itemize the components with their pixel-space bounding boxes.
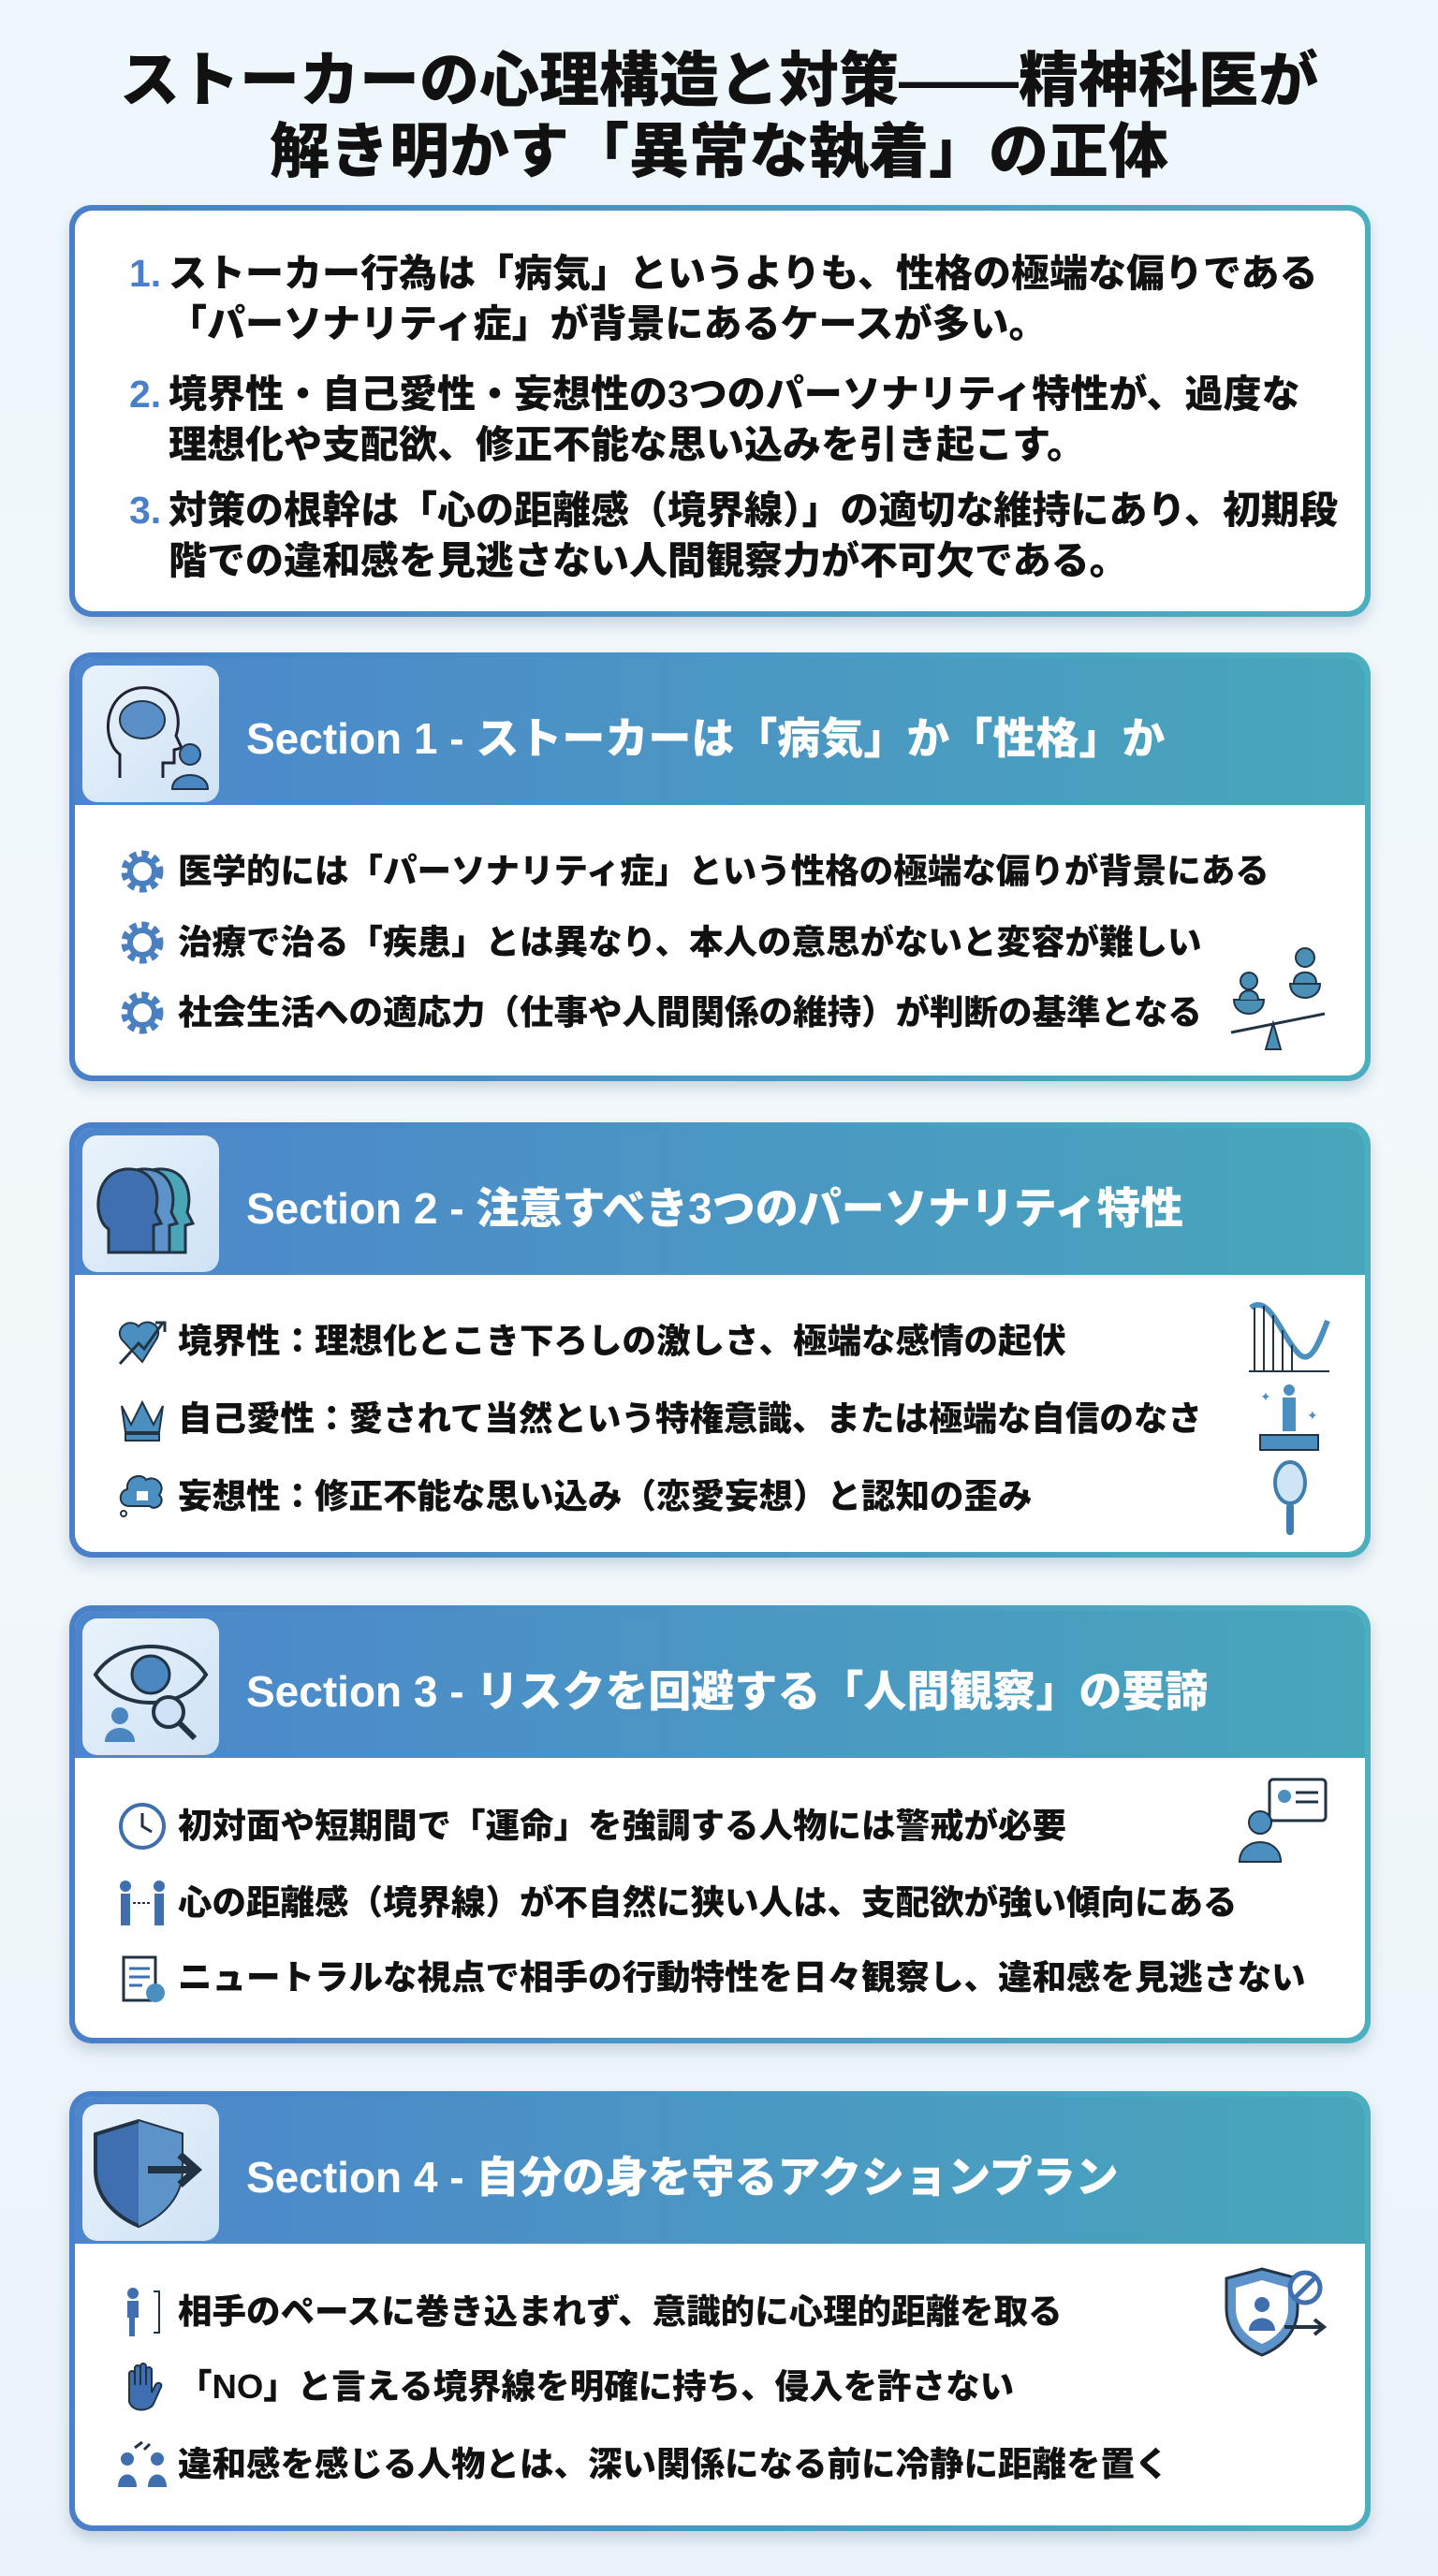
bullet 3-3: ニュートラルな視点で相手の行動特性を日々観察し、違和感を見逃さない [178, 1958, 1305, 1997]
summary point 3: 階での違和感を見逃さない人間観察力が不可欠である。 [169, 539, 1128, 582]
panel: section 3 [69, 1605, 1371, 2043]
icon: head with brain [82, 666, 219, 802]
summary point 3 [129, 489, 1338, 582]
icon: gear [122, 992, 163, 1033]
icon: clock [119, 1803, 166, 1850]
summary point 2 [129, 373, 1300, 466]
summary point 3: 対策の根幹は「心の距離感（境界線）」の適切な維持にあり、初期段 [169, 489, 1338, 532]
section 4 header: Section 4 - 自分の身を守るアクションプラン [246, 2153, 1119, 2202]
section 3 header [75, 1611, 1365, 1758]
section 1 header: Section 1 - ストーカーは「病気」か「性格」か [246, 714, 1165, 763]
bullet 1-2: 治療で治る「疾患」とは異なり、本人の意思がないと変容が難しい [178, 923, 1202, 961]
title [120, 47, 1318, 185]
icon: shield with arrow [82, 2104, 219, 2241]
icon: heart arrow [118, 1322, 167, 1365]
summary point 1: 「パーソナリティ症」が背景にあるケースが多い。 [169, 302, 1047, 345]
icon: thought cloud lock [120, 1475, 163, 1517]
summary point 2: 境界性・自己愛性・妄想性の3つのパーソナリティ特性が、過度な [169, 373, 1300, 416]
bullet 3-2: 心の距離感（境界線）が不自然に狭い人は、支配欲が強い傾向にある [178, 1883, 1238, 1922]
icon: gear [122, 850, 163, 893]
section 4 header [75, 2097, 1365, 2244]
summary point 2: 理想化や支配欲、修正不能な思い込みを引き起こす。 [169, 423, 1085, 466]
icon: hand mirror [1273, 1460, 1307, 1535]
bullet 1-1: 医学的には「パーソナリティ症」という性格の極端な偏りが背景にある [178, 852, 1269, 890]
icon: crown [121, 1400, 164, 1442]
panel: section 1 [69, 652, 1371, 1081]
icon: two people distance [120, 1881, 165, 1925]
section 2 header: Section 2 - 注意すべき3つのパーソナリティ特性 [246, 1184, 1183, 1233]
bullet 4-3: 違和感を感じる人物とは、深い関係になる前に冷静に距離を置く [178, 2445, 1168, 2483]
section 3 header: Section 3 - リスクを回避する「人間観察」の要諦 [246, 1667, 1208, 1716]
title: 解き明かす「異常な執着」の正体 [270, 118, 1168, 185]
icon: person stepping back [127, 2288, 160, 2336]
icon: person with profile card [1239, 1778, 1328, 1863]
bullet 2-1: 境界性：理想化とこき下ろしの激しさ、極端な感情の起伏 [178, 1322, 1066, 1360]
icon: pedestal statue: ✦ [1307, 1408, 1318, 1423]
icon: gear [122, 921, 163, 964]
section 2 header [75, 1128, 1365, 1275]
panel: section 4 [69, 2091, 1371, 2531]
title: ストーカーの心理構造と対策——精神科医が [120, 47, 1318, 114]
icon: eye with magnifier [82, 1618, 219, 1755]
bullet 2-3: 妄想性：修正不能な思い込み（恋愛妄想）と認知の歪み [178, 1477, 1032, 1515]
bullet 4-1: 相手のペースに巻き込まれず、意識的に心理的距離を取る [178, 2292, 1063, 2331]
icon: shield with prohibited person [1225, 2267, 1328, 2357]
icon: two people broken link [118, 2441, 167, 2487]
bullet 4-2: 「NO」と言える境界線を明確に持ち、侵入を許さない [178, 2367, 1014, 2406]
bullet 3-1: 初対面や短期間で「運命」を強調する人物には警戒が必要 [178, 1807, 1066, 1845]
summary point 1: ストーカー行為は「病気」というよりも、性格の極端な偏りである [169, 252, 1318, 295]
icon: roller coaster [1249, 1302, 1330, 1372]
bullet 2-2: 自己愛性：愛されて当然という特権意識、または極端な自信のなさ [178, 1399, 1202, 1438]
summary point 1 [129, 252, 1318, 345]
panel: summary: 2. [129, 373, 161, 416]
bullet 1-3: 社会生活への適応力（仕事や人間関係の維持）が判断の基準となる [178, 993, 1202, 1032]
icon: pedestal statue: ✦ [1260, 1389, 1271, 1404]
panel: summary: 1. [129, 252, 161, 295]
icon: stop hand [128, 2363, 163, 2411]
icon: three heads [82, 1135, 219, 1272]
icon: clipboard check [122, 1956, 165, 2002]
section 1 header [75, 658, 1365, 805]
icon: balance scale [1230, 947, 1326, 1050]
panel: section 2 [69, 1122, 1371, 1558]
panel: summary: 3. [129, 489, 161, 532]
icon: pedestal statue [1259, 1384, 1319, 1451]
panel: summary [69, 205, 1371, 617]
